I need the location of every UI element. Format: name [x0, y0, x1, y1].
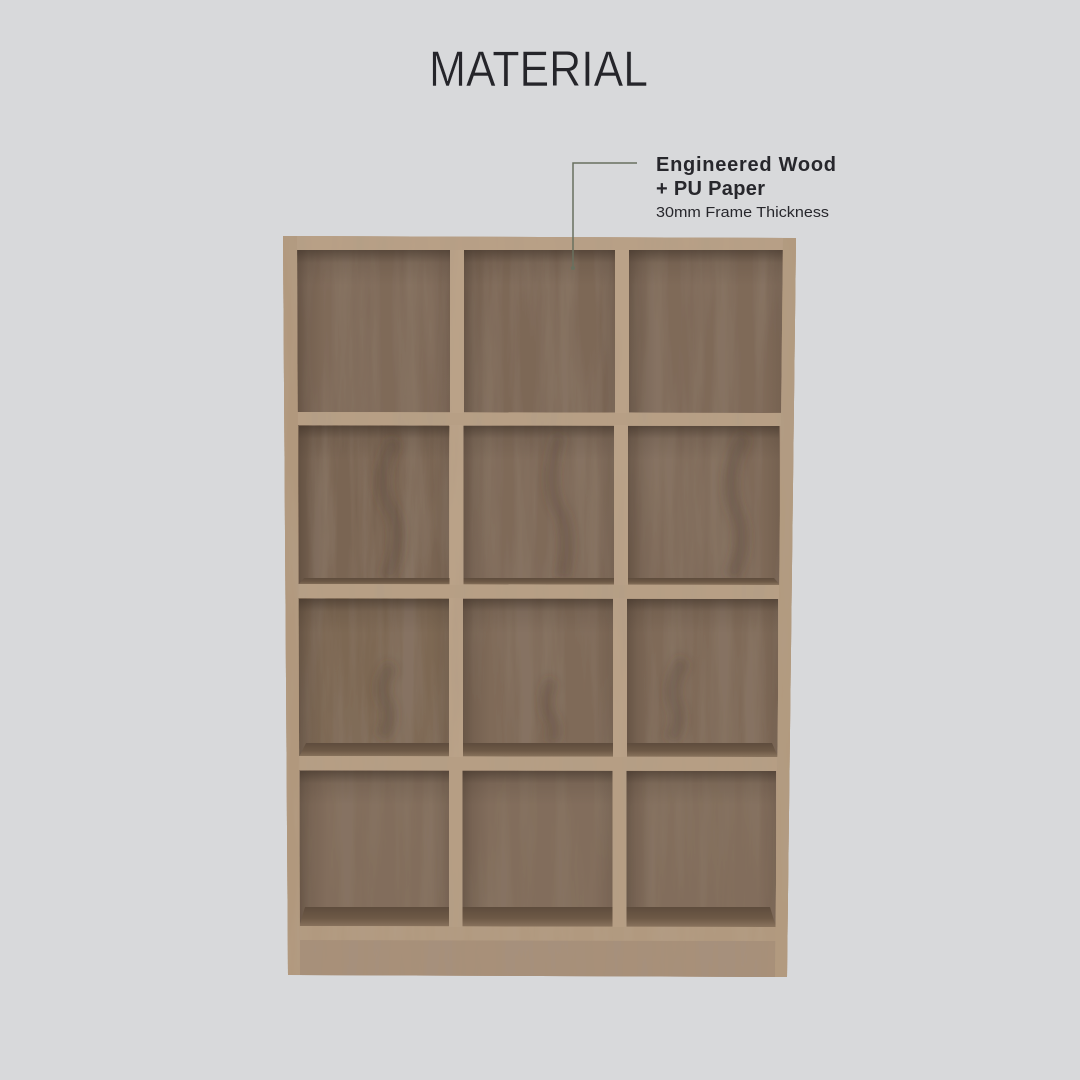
soft wood figure [382, 435, 745, 742]
horizontal shelves [295, 236, 785, 941]
title: MATERIAL [429, 41, 648, 97]
callout text [656, 154, 836, 221]
vertical dividers [449, 250, 629, 927]
compartment shading [297, 250, 783, 926]
plinth [298, 940, 776, 977]
callout detail: 30mm Frame Thickness [656, 205, 829, 221]
carcass base [283, 236, 796, 977]
callout heading line 1: Engineered Wood [656, 154, 836, 176]
shelf floors seen from above [298, 578, 780, 927]
bookcase [283, 236, 796, 977]
back panels of the twelve compartments [297, 250, 783, 927]
side panels [283, 236, 796, 977]
callout heading line 2: + PU Paper [656, 178, 765, 200]
callout leader line [572, 163, 637, 270]
